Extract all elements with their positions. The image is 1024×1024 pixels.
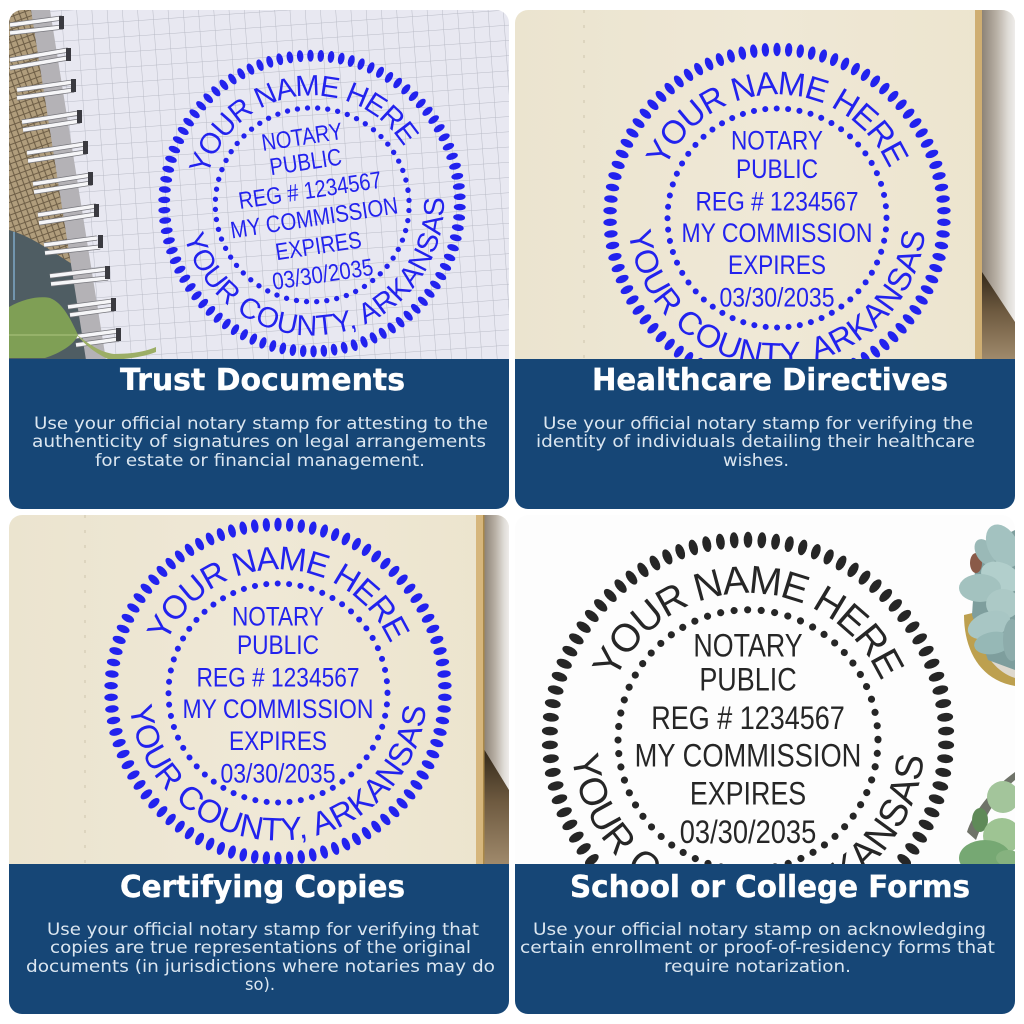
body text [538,416,974,466]
stamp impression: 03/30/2035 [270,254,375,296]
body text: copies are true representations of the original [50,938,471,958]
body text: certain enrollment or proof-of-residency forms that [520,938,995,958]
stamp impression: PUBLIC [699,662,797,698]
panel: healthcare directives [515,10,1015,509]
panel: school or college forms [515,524,1015,1014]
body text: wishes. [723,451,789,471]
body text: documents (in jurisdictions where notaries may do [26,957,495,977]
caption band [9,864,509,1014]
stamp impression: PUBLIC [268,144,344,181]
body text: identity of individuals detailing their healthcare [536,432,975,452]
stamp impression: MY COMMISSION [682,218,872,248]
stamp impression: NOTARY [232,602,324,632]
stamp impression: YOUR COUNTY, ARKANSAS [574,752,923,864]
body text [32,414,488,471]
body text: Use your official notary stamp for attesting to the [34,414,488,434]
stamp impression: YOUR NAME HERE [592,566,904,680]
stamp impression: MY COMMISSION [635,737,861,773]
photo: white desk with succulents [959,524,1015,864]
stamp impression [603,42,951,359]
stamp impression: NOTARY [260,118,344,157]
body text: for estate or financial management. [95,451,425,471]
stamp impression: REG # 1234567 [651,700,845,736]
stamp impression: 03/30/2035 [680,814,816,850]
stamp impression: PUBLIC [237,630,319,660]
stamp impression: YOUR NAME HERE [146,546,410,642]
heading: Trust Documents [120,363,405,398]
body text [26,920,495,995]
photo: spiral notebook on burlap [9,10,509,360]
body text: Use your official notary stamp on acknowledging [533,920,986,940]
stamp impression: YOUR NAME HERE [645,72,909,168]
stamp impression: 03/30/2035 [720,282,834,312]
body text: so). [245,975,275,995]
body text: require notarization. [664,957,851,977]
stamp impression: YOUR NAME HERE [188,75,420,168]
stamp impression: EXPIRES [728,250,826,280]
stamp impression [158,50,466,358]
heading: Healthcare Directives [592,363,948,398]
heading: School or College Forms [570,870,970,905]
stamp impression: REG # 1234567 [696,186,858,216]
body text: Use your official notary stamp for verifying that [47,920,479,940]
stamp impression: EXPIRES [229,726,327,756]
stamp impression: YOUR COUNTY, ARKANSAS [186,198,444,336]
stamp impression: YOUR COUNTY, ARKANSAS [131,704,426,843]
stamp impression: EXPIRES [274,227,363,266]
stamp impression [104,518,452,864]
stamp impression: PUBLIC [736,154,818,184]
body text: Use your official notary stamp for verifying the [543,414,973,434]
stamp impression: 03/30/2035 [220,758,336,788]
stamp impression: EXPIRES [690,775,806,811]
stamp impression: YOUR COUNTY, ARKANSAS [630,228,924,359]
stamp impression: MY COMMISSION [182,694,374,724]
panel: certifying copies [9,515,509,1014]
stamp impression [542,532,954,864]
photo: cream paper with fabric [515,10,1015,360]
body text: authenticity of signatures on legal arrangements [32,432,486,452]
stamp impression: NOTARY [731,126,823,156]
stamp impression: NOTARY [693,628,803,664]
body text [520,920,995,977]
heading: Certifying Copies [120,870,405,905]
panel: trust documents [9,10,509,509]
caption band [515,359,1015,509]
caption band [9,359,509,509]
caption band [515,864,1015,1014]
stamp impression: REG # 1234567 [237,167,383,215]
photo: cream paper with fabric [9,515,509,865]
stamp impression: REG # 1234567 [196,662,360,692]
stamp impression: MY COMMISSION [229,192,400,244]
